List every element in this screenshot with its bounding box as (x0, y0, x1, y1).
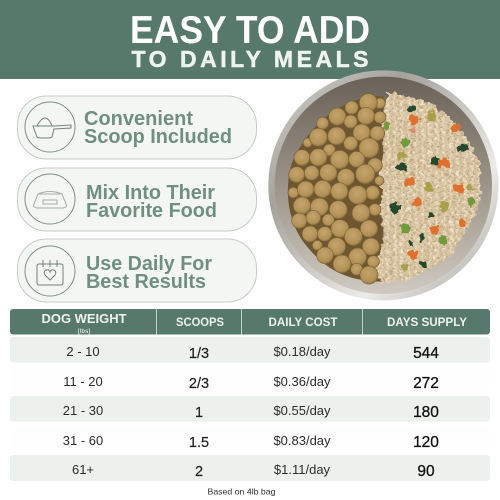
table row 11-20: $0.36/day (273, 374, 331, 389)
panel: use daily: Use Daily For (86, 253, 212, 275)
table row 11-20: 272 (413, 375, 439, 392)
panel: mix into food: Mix Into Their (86, 182, 215, 204)
photo: bowl of kibble and rice food (268, 70, 498, 300)
table header: DAYS SUPPLY (387, 317, 467, 329)
table row 11-20: 11 - 20 (63, 374, 103, 389)
panel: use daily (18, 239, 256, 302)
table row 21-30: 180 (413, 404, 439, 421)
table header: DAILY COST (268, 317, 338, 329)
table header (10, 309, 490, 335)
table row 2-10 (10, 337, 490, 362)
table header: SCOOPS (176, 317, 224, 329)
table row 31-60 (10, 426, 490, 452)
panel: convenient scoop: Scoop Included (84, 126, 232, 148)
table row 21-30: 21 - 30 (63, 403, 103, 418)
table row 21-30: $0.55/day (273, 403, 331, 418)
table row 61+: 2 (195, 464, 203, 480)
footnote: Based on 4lb bag (208, 486, 276, 496)
table row 61+ (10, 455, 490, 481)
table row 11-20 (10, 367, 490, 392)
table row 61+: 90 (417, 463, 435, 480)
table row 61+: $1.11/day (274, 462, 331, 477)
header banner (0, 0, 500, 79)
table row 31-60: 1.5 (189, 435, 209, 451)
table row 31-60: 31 - 60 (63, 433, 103, 448)
table header: DOG WEIGHT (42, 312, 127, 326)
table row 31-60: $0.83/day (273, 433, 331, 448)
table row 2-10: 2 - 10 (66, 344, 100, 359)
table row 11-20: 2/3 (189, 376, 209, 392)
panel: mix into food: Favorite Food (86, 200, 217, 222)
panel: mix into food (18, 168, 256, 231)
table row 21-30: 1 (195, 405, 203, 421)
panel: use daily: Best Results (86, 271, 206, 293)
table row 31-60: 120 (413, 434, 439, 451)
title: EASY TO ADD (130, 9, 370, 52)
panel: convenient scoop: Convenient (84, 108, 193, 130)
table row 2-10: 544 (413, 345, 439, 362)
subtitle: TO DAILY MEALS (132, 46, 368, 72)
icon: scoop (33, 118, 71, 138)
icon: dog bowl (33, 192, 67, 208)
table header: (lbs) (78, 329, 90, 335)
panel: convenient scoop (18, 96, 256, 159)
icon: calendar with heart (37, 260, 63, 285)
table row 2-10: $0.18/day (273, 344, 331, 359)
table row 61+: 61+ (72, 462, 94, 477)
table row 2-10: 1/3 (189, 346, 209, 362)
table row 21-30 (10, 396, 490, 422)
